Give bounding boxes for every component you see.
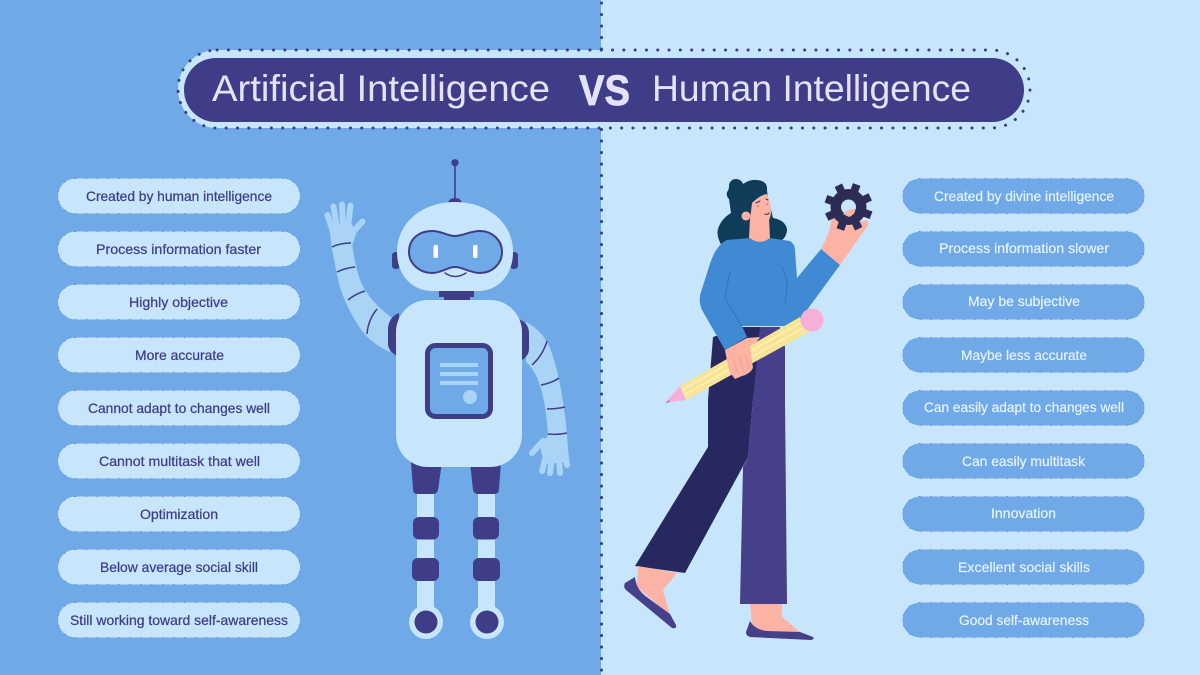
left list: AI traits: Process information faster — [96, 241, 261, 257]
robot visor — [409, 231, 502, 273]
raised hand — [821, 217, 868, 265]
background: left panel — [0, 0, 601, 675]
title left: Artificial Intelligence — [212, 68, 550, 109]
hair back — [718, 179, 787, 246]
right list: human traits: Innovation — [991, 505, 1056, 521]
sweater — [700, 238, 840, 350]
illustration: woman — [624, 179, 872, 640]
right list: human traits — [902, 178, 1144, 638]
right list: human traits: Can easily multitask — [962, 453, 1086, 469]
gear icon — [825, 183, 872, 231]
left list: AI traits — [58, 178, 300, 638]
sweater folds — [725, 267, 787, 326]
left list: AI traits: Optimization — [140, 506, 218, 522]
robot ears — [392, 252, 518, 269]
neck and face — [742, 194, 771, 242]
foot back — [637, 566, 677, 615]
shoe back — [624, 577, 676, 628]
right list: human traits: May be subjective — [968, 293, 1080, 309]
left list: AI traits: More accurate — [135, 347, 224, 363]
left list: AI traits: Cannot adapt to changes well — [88, 400, 270, 416]
title right: Human Intelligence — [652, 68, 971, 109]
foot front — [750, 604, 800, 632]
left list: AI traits: Highly objective — [129, 294, 228, 310]
robot body — [396, 300, 522, 467]
right list: human traits: Can easily adapt to changes well — [924, 399, 1124, 415]
right list: human traits: Created by divine intelligence — [934, 188, 1114, 204]
left list: AI traits: Created by human intelligence — [86, 188, 272, 204]
pencil — [665, 308, 824, 403]
left list: AI traits: Still working toward self-awareness — [70, 612, 288, 628]
right list: human traits: Maybe less accurate — [961, 347, 1087, 363]
robot smile — [445, 273, 466, 276]
right list: human traits: Good self-awareness — [959, 612, 1089, 628]
trousers back leg — [635, 327, 762, 573]
robot left arm raised — [328, 204, 392, 352]
left list: AI traits: Below average social skill — [100, 559, 258, 575]
illustration: robot — [328, 159, 568, 639]
robot head — [397, 202, 513, 291]
right list: human traits: Excellent social skills — [958, 559, 1090, 575]
title banner — [178, 50, 1030, 128]
left list: AI traits: Cannot multitask that well — [99, 453, 260, 469]
facial features — [756, 199, 769, 214]
shoe front — [746, 621, 814, 640]
robot shoulder joints — [388, 313, 529, 362]
hand on pencil — [725, 337, 760, 379]
robot neck — [439, 290, 474, 302]
robot eyes — [434, 245, 478, 258]
robot legs — [409, 462, 504, 639]
trousers front leg — [740, 327, 787, 604]
center dotted divider — [600, 3, 603, 675]
right list: human traits: Process information slower — [939, 240, 1109, 256]
background: right panel — [601, 0, 1200, 675]
robot chest panel — [428, 346, 490, 416]
robot antenna — [448, 159, 462, 203]
robot right arm lowered — [526, 322, 568, 473]
title VS: VS — [579, 67, 630, 115]
finger on gear — [843, 209, 855, 217]
